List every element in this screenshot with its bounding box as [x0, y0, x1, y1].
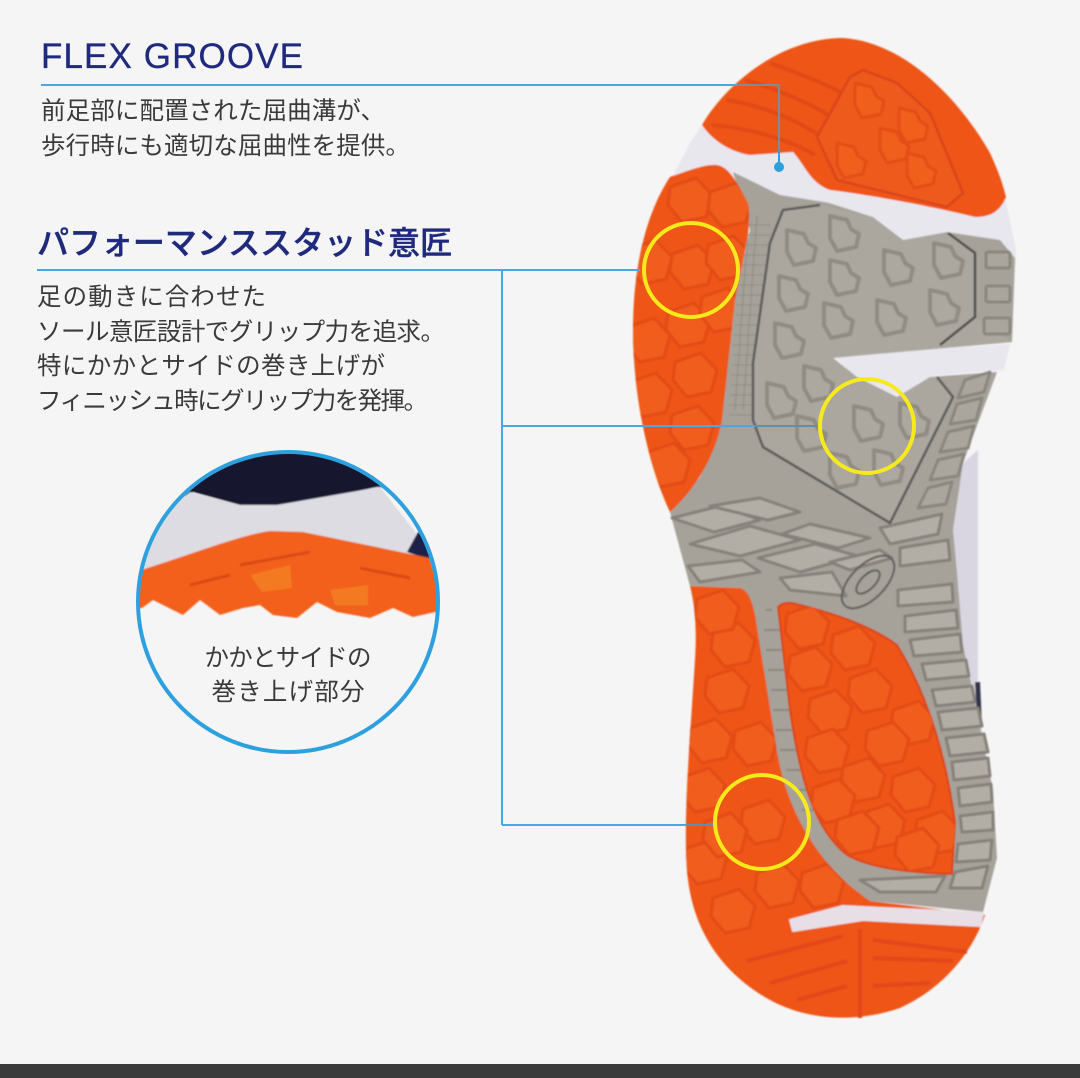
central pad studs — [767, 216, 963, 488]
heel orange pad — [686, 586, 985, 1018]
inset caption: かかとサイドの — [204, 645, 372, 672]
asics logo — [833, 547, 903, 617]
heel lugs — [681, 590, 844, 933]
heel grooves — [747, 929, 967, 1018]
medial heel pad lugs — [785, 605, 959, 872]
forefoot grooves — [712, 63, 845, 155]
text: flex groove description — [41, 97, 410, 160]
waist ribs — [672, 498, 950, 596]
shoe upper sliver — [950, 450, 985, 760]
inset border — [138, 452, 438, 752]
heading: flex groove: FLEX GROOVE — [41, 37, 303, 76]
heel white stripe — [790, 906, 983, 931]
inset navy accent — [407, 532, 432, 560]
lateral orange pad — [633, 165, 749, 512]
forefoot side pad outline — [940, 233, 975, 345]
inset caption: 巻き上げ部分 — [212, 678, 364, 706]
grey outsole base — [670, 172, 1015, 912]
medial heel pad — [778, 603, 955, 874]
inset orange midsole — [135, 531, 445, 618]
forefoot orange pad — [702, 38, 1006, 217]
inset circle: heel side wrap-up — [130, 440, 450, 752]
text: performance stud description — [37, 283, 445, 415]
inset white upper — [144, 486, 432, 571]
midsole silhouette — [672, 125, 1016, 340]
rear side ribs — [860, 584, 993, 892]
heading: performance stud: パフォーマンススタッド意匠 — [37, 225, 452, 261]
white arrow flex groove — [833, 344, 1010, 398]
leader lines — [37, 85, 820, 825]
forefoot lugs — [837, 83, 936, 188]
text: performance stud description: ソール意匠設計でグリップ力を追求。 — [37, 318, 445, 346]
forefoot side ribs — [918, 252, 1010, 508]
flex groove leader — [41, 84, 737, 86]
forefoot white band — [675, 125, 1013, 240]
inset caption — [204, 645, 372, 706]
text: performance stud description: 特にかかとサイドの巻き上げが — [37, 352, 385, 380]
central pad — [753, 205, 1012, 523]
text: flex groove description: 前足部に配置された屈曲溝が、 — [41, 97, 385, 125]
text: performance stud description: フィニッシュ時にグリップ力を発揮。 — [37, 387, 428, 415]
inset lugs — [250, 565, 368, 605]
inset groove lines — [190, 552, 410, 585]
lateral pad lugs — [626, 178, 752, 487]
shoe sole illustration — [626, 38, 1016, 1018]
dark upper accents — [975, 682, 982, 726]
inset upper navy — [184, 454, 382, 506]
stud leader — [37, 270, 755, 825]
heel channel grid — [764, 610, 820, 810]
central pad outline — [753, 205, 953, 523]
bottom dark bar — [0, 1064, 1080, 1078]
flex groove dot — [774, 162, 784, 172]
text: flex groove description: 歩行時にも適切な屈曲性を提供。 — [41, 132, 410, 160]
midfoot texture grid — [729, 215, 770, 415]
forefoot inner pad — [817, 70, 963, 207]
text: performance stud description: 足の動きに合わせた — [37, 283, 266, 311]
yellow callout circles — [644, 223, 914, 869]
